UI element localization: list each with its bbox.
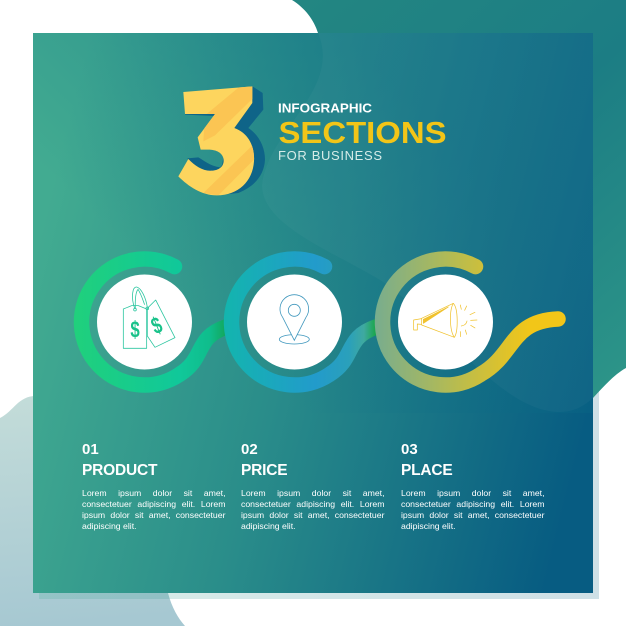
column 03 place bbox=[401, 441, 544, 531]
text block 01: adipiscing elit. bbox=[82, 521, 137, 531]
text block 01: ipsum dolor sit amet, consectetuer bbox=[82, 510, 226, 520]
number 02: 02 bbox=[241, 441, 258, 458]
background blob: bottom left bbox=[0, 396, 185, 626]
step 3 ring bbox=[383, 259, 558, 385]
title: infographic: INFOGRAPHIC bbox=[278, 100, 373, 116]
step 1 ring bbox=[82, 259, 226, 385]
number 3 face bbox=[178, 86, 254, 195]
text block 02: adipiscing elit. bbox=[241, 521, 296, 531]
text block 03: ipsum dolor sit amet, consectetuer bbox=[401, 510, 544, 520]
icon: price tags: $ bbox=[130, 318, 140, 343]
text block 01: consectetuer adipiscing elit. Lorem bbox=[82, 499, 226, 509]
number 3 inner shadow bbox=[185, 112, 225, 175]
number 01: 01 bbox=[82, 441, 99, 458]
heading place: PLACE bbox=[401, 462, 453, 479]
number 3 extrusion bbox=[217, 86, 265, 195]
title: for business: FOR BUSINESS bbox=[278, 148, 382, 163]
ring 2 connector bbox=[232, 259, 376, 385]
card inner wave overlay bbox=[262, 33, 593, 412]
text block 02 bbox=[241, 488, 384, 531]
text block 02: Lorem ipsum dolor sit amet, bbox=[241, 488, 384, 498]
icon: price tags: $ bbox=[148, 313, 167, 340]
ring 3 tail bbox=[383, 259, 558, 385]
background blob: top right bbox=[292, 0, 626, 398]
step 2 ring bbox=[232, 259, 376, 385]
circle 3 bbox=[398, 274, 493, 370]
text block 03: consectetuer adipiscing elit. Lorem bbox=[401, 499, 544, 509]
text block 02: ipsum dolor sit amet, consectetuer bbox=[241, 510, 384, 520]
icon: location pin bbox=[279, 295, 309, 344]
column 01 product bbox=[82, 441, 226, 531]
number 03: 03 bbox=[401, 441, 418, 458]
text block 01 bbox=[82, 488, 226, 531]
big number 3 bbox=[178, 86, 265, 195]
title: sections: SECTIONS bbox=[278, 115, 446, 150]
ring 1 connector bbox=[82, 259, 226, 385]
heading price: PRICE bbox=[241, 462, 287, 479]
text block 02: consectetuer adipiscing elit. Lorem bbox=[241, 499, 384, 509]
text block 03: Lorem ipsum dolor sit amet, bbox=[401, 488, 544, 498]
icon: price tags bbox=[123, 287, 175, 348]
column 02 price bbox=[241, 441, 384, 531]
card top shading bbox=[33, 33, 593, 413]
heading product: PRODUCT bbox=[82, 462, 157, 479]
circle 1 bbox=[97, 274, 192, 370]
icon: megaphone bbox=[414, 303, 477, 337]
text block 01: Lorem ipsum dolor sit amet, bbox=[82, 488, 226, 498]
text block 03: adipiscing elit. bbox=[401, 521, 456, 531]
number 3 stripes bbox=[203, 86, 257, 195]
text block 03 bbox=[401, 488, 544, 531]
circle 2 bbox=[247, 274, 342, 370]
